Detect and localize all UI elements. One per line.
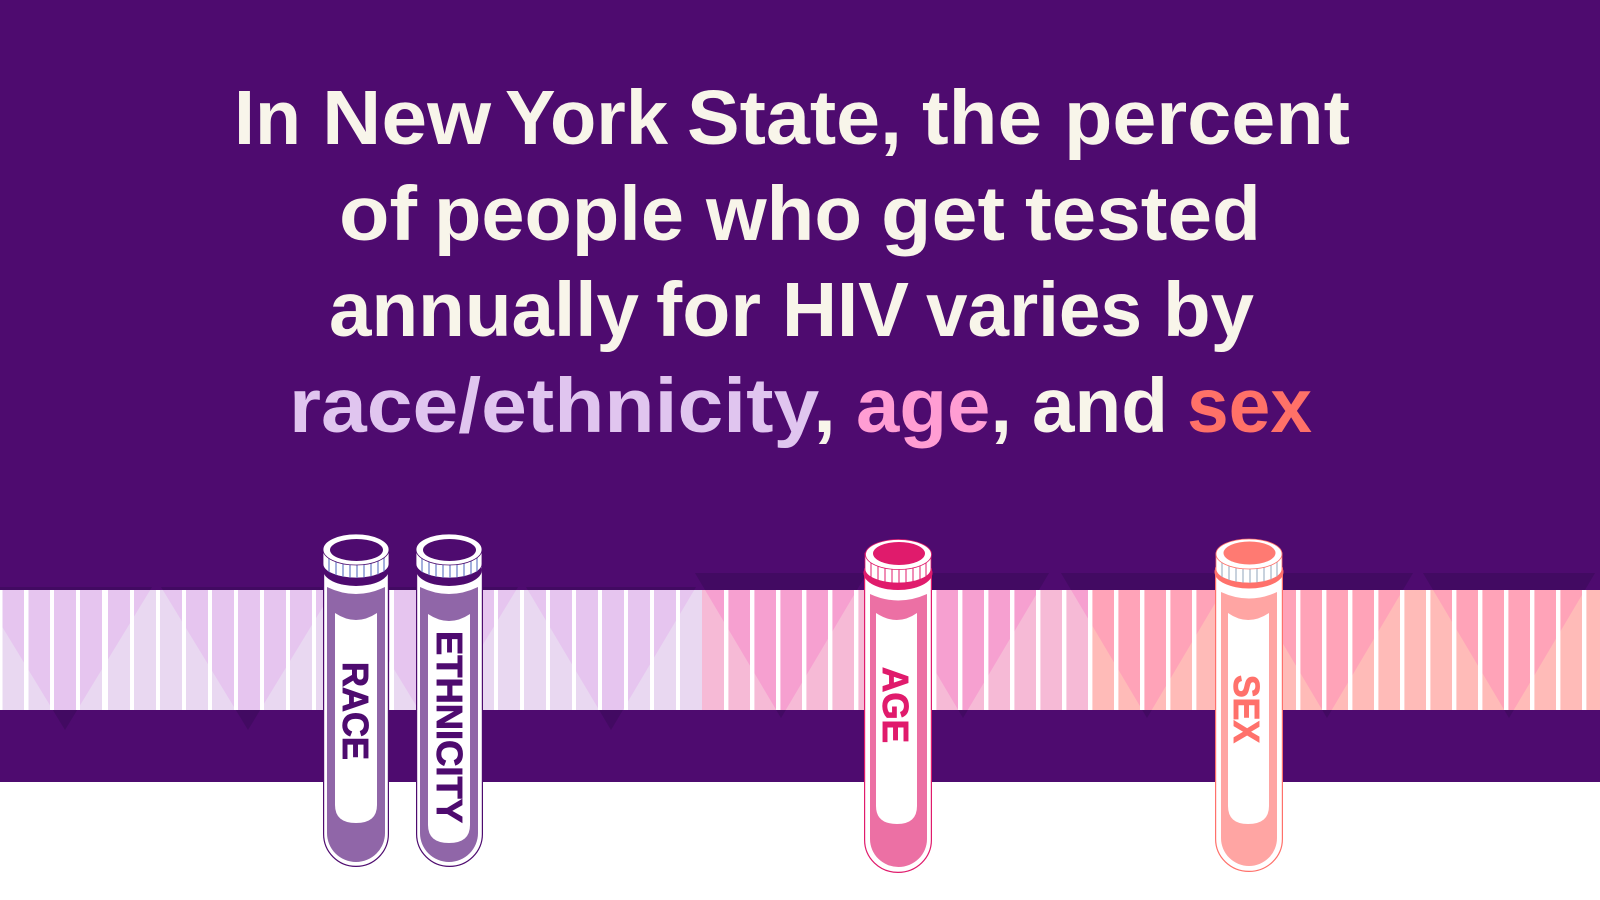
collar ring — [864, 556, 932, 590]
dark triangles behind the band — [0, 573, 1595, 730]
tube body — [865, 569, 931, 872]
title: who — [705, 171, 862, 257]
test tube: age — [864, 540, 932, 872]
tube label text: RACE — [335, 662, 376, 760]
cap — [416, 534, 482, 578]
title: and — [1032, 363, 1168, 449]
test tube: ethnicity — [416, 534, 482, 866]
band section: age — [702, 590, 1088, 710]
title: annually — [329, 267, 639, 353]
collar ring — [1214, 556, 1284, 588]
title: people — [434, 171, 684, 257]
patterned band — [0, 590, 1600, 710]
label panel — [876, 613, 917, 824]
title: tested — [1025, 171, 1261, 257]
title: sex — [1187, 363, 1312, 449]
title: State, — [687, 75, 902, 161]
cap — [1216, 538, 1282, 583]
white stripes — [0, 590, 1600, 710]
liquid — [327, 587, 385, 862]
band section: race and ethnicity — [2, 590, 702, 710]
collar ring — [416, 554, 482, 586]
title: for — [656, 267, 761, 353]
collar ring — [323, 554, 389, 586]
title — [234, 75, 1350, 449]
test tube: sex — [1214, 539, 1284, 871]
test tube: race — [323, 534, 389, 866]
title: of — [339, 171, 417, 257]
label panel — [335, 613, 377, 823]
tube label text: AGE — [875, 667, 916, 743]
title: the — [922, 75, 1042, 161]
cap — [864, 539, 932, 583]
title: In — [234, 75, 301, 161]
liquid — [420, 587, 478, 862]
title: York — [505, 75, 668, 161]
title: varies — [926, 267, 1142, 353]
tube label text: ETHNICITY — [429, 631, 470, 823]
title: age, — [856, 363, 1012, 449]
title: get — [881, 171, 1005, 257]
title: percent — [1064, 75, 1350, 161]
tube body — [417, 563, 482, 866]
band section: sex — [1092, 590, 1600, 710]
tube label text: SEX — [1226, 675, 1267, 743]
title: race/ethnicity , — [289, 363, 836, 449]
liquid — [1221, 592, 1277, 866]
title: New — [322, 75, 492, 161]
tube body — [1216, 568, 1282, 871]
title: by — [1163, 267, 1254, 353]
liquid — [870, 594, 927, 867]
tube body — [324, 563, 388, 866]
label panel — [1228, 613, 1269, 824]
label panel — [428, 614, 470, 843]
title: HIV — [782, 267, 909, 353]
cap — [323, 534, 389, 578]
